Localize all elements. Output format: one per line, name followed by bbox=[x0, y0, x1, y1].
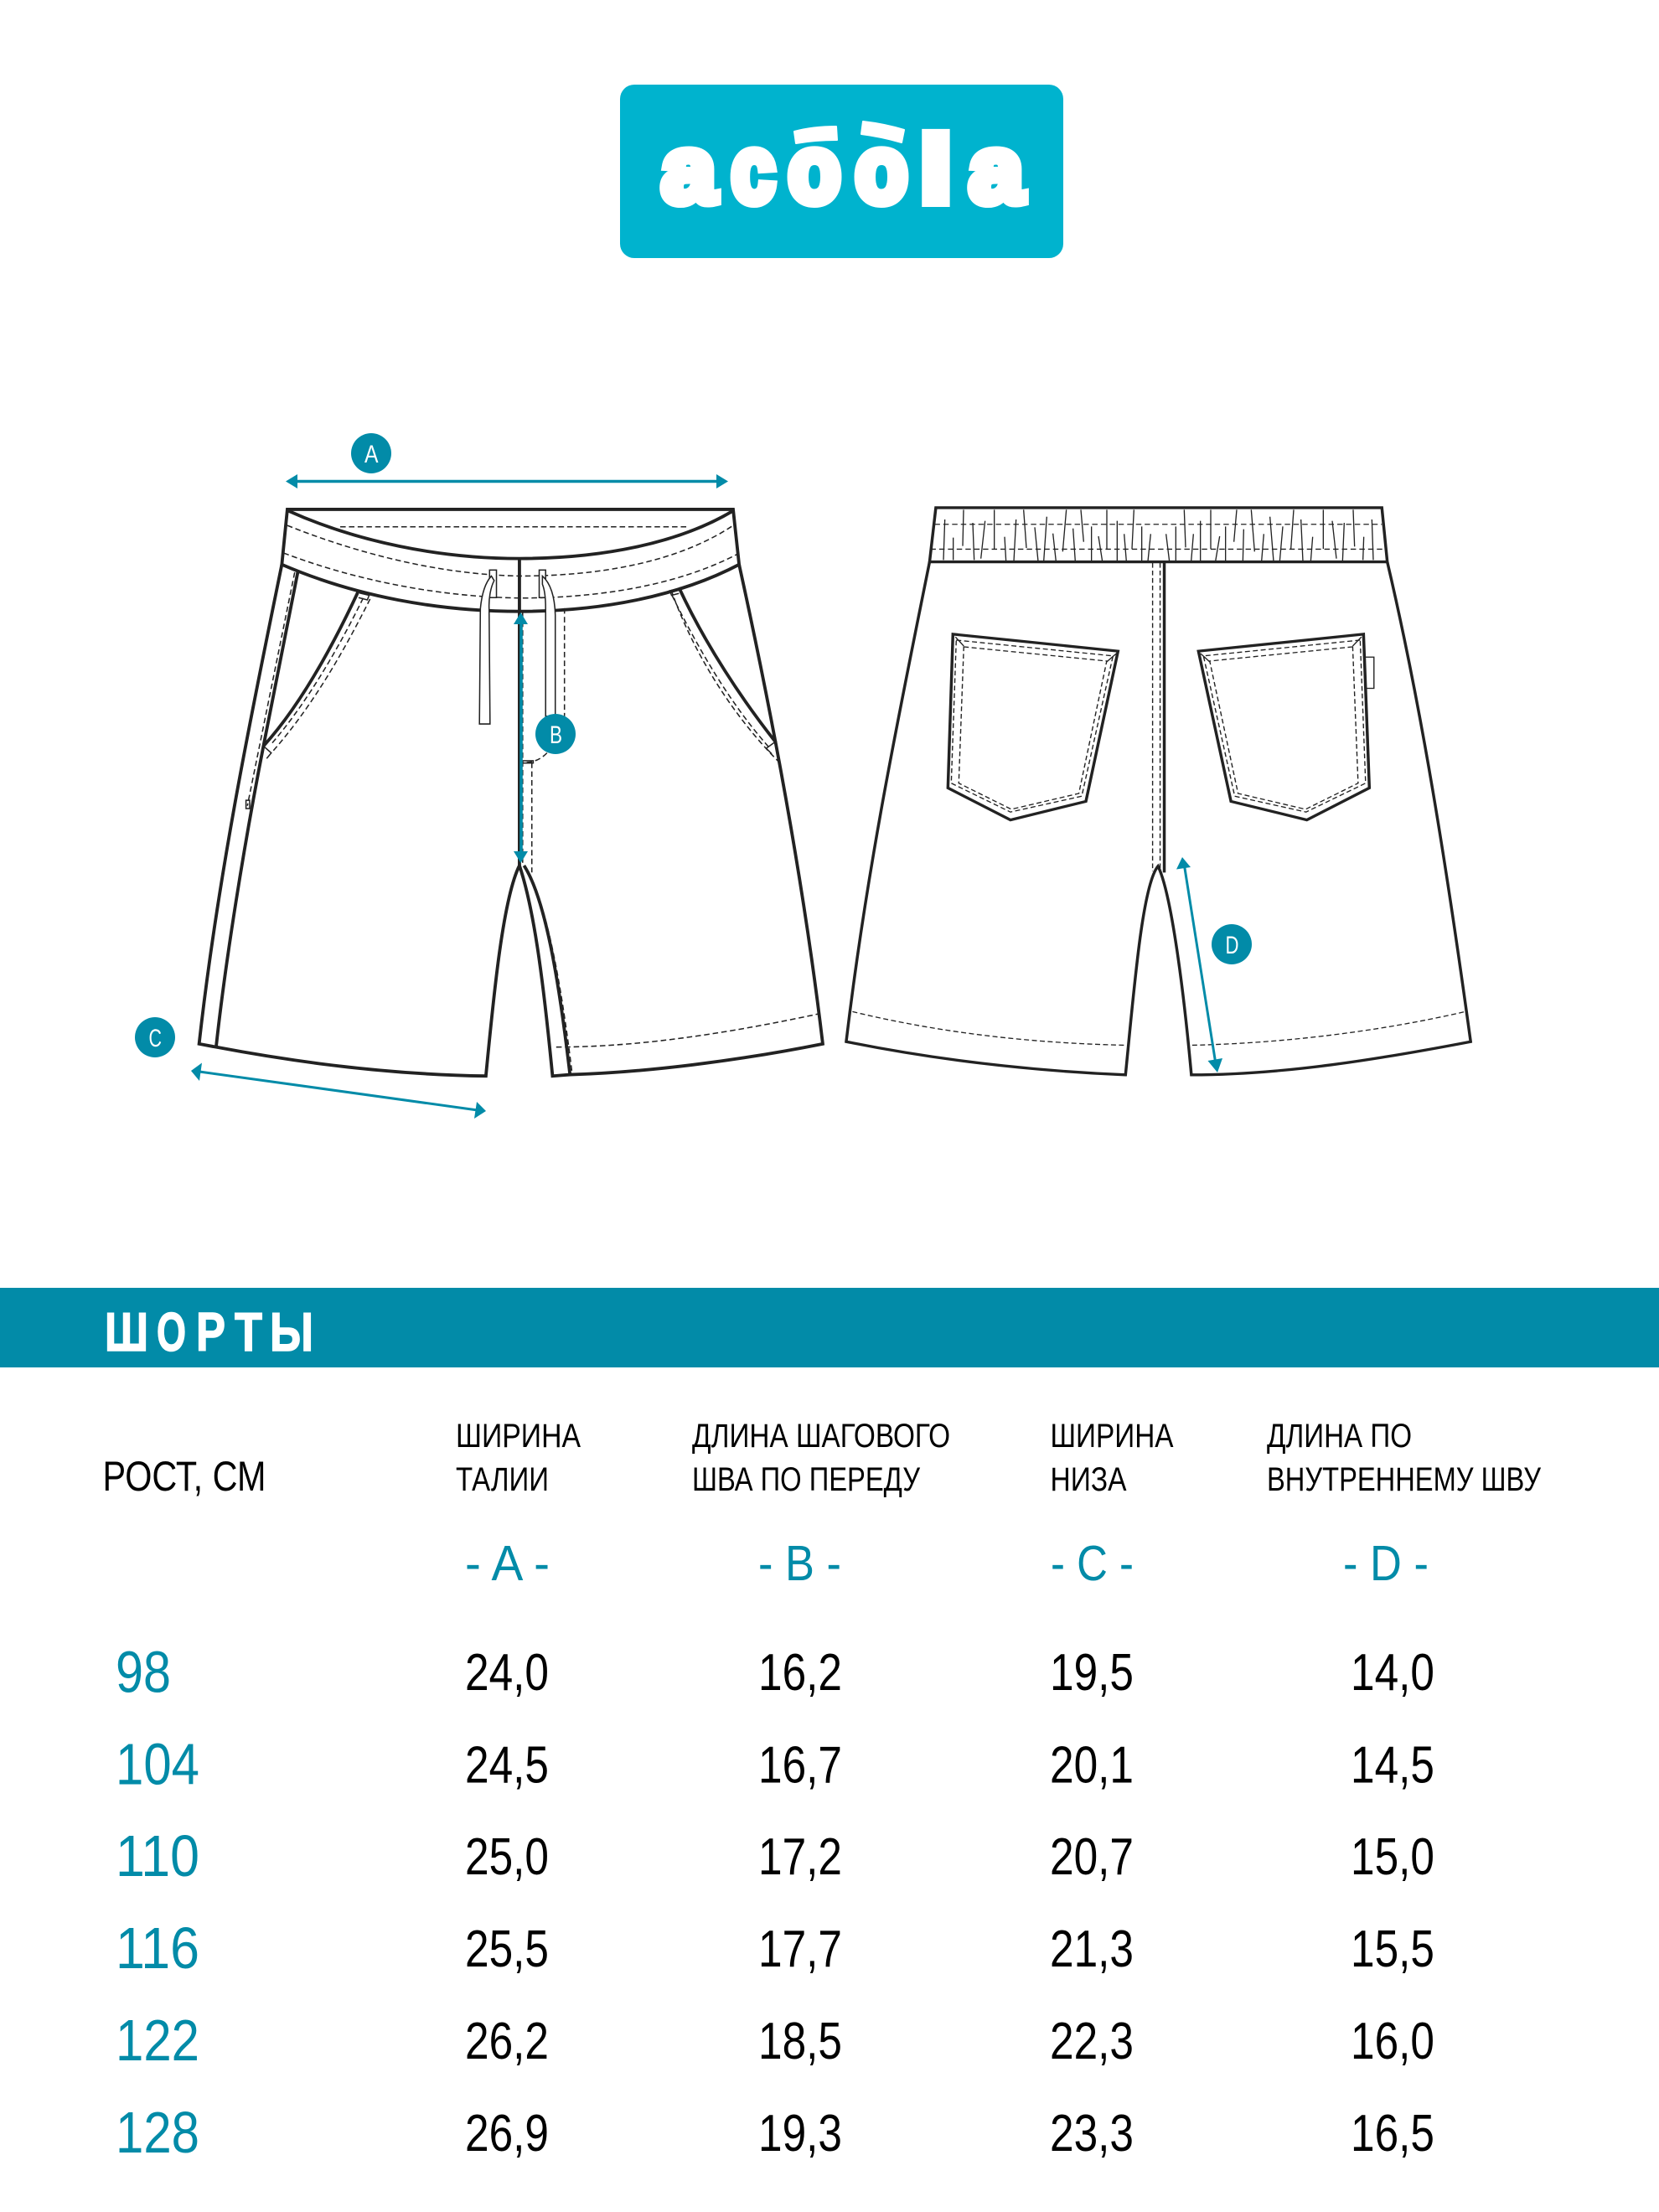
badge D: D bbox=[1225, 932, 1238, 959]
column header: front rise: ДЛИНА ШАГОВОГО bbox=[692, 1418, 950, 1455]
right back pocket bbox=[1198, 634, 1374, 820]
elastic waistband outline bbox=[929, 508, 1388, 562]
heading: shorts: Ш bbox=[105, 1301, 148, 1362]
logo: acoola: a bbox=[662, 117, 716, 222]
heading: shorts: О bbox=[157, 1301, 186, 1362]
row 128: 26,9 bbox=[465, 2105, 549, 2163]
row 116: 21,3 bbox=[1050, 1920, 1134, 1978]
row 122: 22,3 bbox=[1050, 2013, 1134, 2070]
drawstrings and fly bbox=[479, 570, 565, 872]
column header: inseam: ВНУТРЕННЕМУ ШВУ bbox=[1267, 1461, 1541, 1498]
row 122 bbox=[116, 2008, 1434, 2073]
row 104: 104 bbox=[116, 1731, 199, 1796]
row 104: 16,7 bbox=[758, 1736, 842, 1795]
arrow A: waist width bbox=[286, 474, 728, 488]
heading: shorts: Т bbox=[235, 1301, 262, 1362]
row 110: 25,0 bbox=[465, 1828, 549, 1886]
row 104: 20,1 bbox=[1050, 1736, 1134, 1795]
row 116: 25,5 bbox=[465, 1920, 549, 1978]
arrow D: inseam bbox=[1176, 857, 1222, 1072]
row 128: 128 bbox=[116, 2100, 199, 2165]
logo: acoola: a bbox=[969, 117, 1024, 222]
column letters bbox=[465, 1536, 1429, 1591]
row 98: 14,0 bbox=[1351, 1644, 1434, 1702]
left back pocket bbox=[948, 634, 1118, 820]
row 98 bbox=[116, 1639, 1434, 1704]
row 128: 19,3 bbox=[758, 2105, 842, 2163]
left pocket bbox=[246, 572, 370, 809]
row 122: 18,5 bbox=[758, 2013, 842, 2070]
column header: hem width: НИЗА bbox=[1051, 1461, 1127, 1498]
row 116: 116 bbox=[116, 1915, 199, 1981]
row 122: 26,2 bbox=[465, 2013, 549, 2070]
logo: acoola: o bbox=[788, 117, 840, 222]
heading: shorts: Ы bbox=[270, 1301, 313, 1362]
waistband gathers, left part bbox=[943, 509, 1170, 561]
row 110: 20,7 bbox=[1050, 1828, 1134, 1886]
column header: inseam: ДЛИНА ПО bbox=[1267, 1418, 1412, 1455]
column header: waist width: ШИРИНА bbox=[456, 1418, 581, 1455]
column header: inseam bbox=[1267, 1418, 1541, 1498]
back view of shorts bbox=[846, 508, 1470, 1075]
column header: waist width: ТАЛИИ bbox=[456, 1461, 549, 1498]
body outline bbox=[846, 562, 1470, 1075]
column letters: - C - bbox=[1051, 1536, 1134, 1591]
row 98: 24,0 bbox=[465, 1644, 549, 1702]
column header: front rise: ШВА ПО ПЕРЕДУ bbox=[692, 1461, 920, 1498]
column letters: - A - bbox=[465, 1536, 550, 1591]
arrow C: hem width bbox=[191, 1062, 486, 1119]
heading: shorts: Р bbox=[196, 1301, 225, 1362]
row 116: 17,7 bbox=[758, 1920, 842, 1978]
logo: acoola: o bbox=[855, 117, 907, 222]
waistband bbox=[282, 509, 739, 612]
row 104 bbox=[116, 1731, 1434, 1796]
badge A: A bbox=[364, 441, 379, 468]
row 110: 17,2 bbox=[758, 1828, 842, 1886]
row 116 bbox=[116, 1915, 1434, 1981]
row 104: 24,5 bbox=[465, 1736, 549, 1795]
badge C bbox=[135, 1017, 175, 1057]
logo: acoola: c bbox=[731, 117, 775, 222]
row 122: 122 bbox=[116, 2008, 199, 2073]
section header band bbox=[0, 1288, 1659, 1367]
row 128: 23,3 bbox=[1050, 2105, 1134, 2163]
row 122: 16,0 bbox=[1351, 2013, 1434, 2070]
column header: waist width bbox=[456, 1418, 581, 1498]
row 98: 16,2 bbox=[758, 1644, 842, 1702]
row 128 bbox=[116, 2100, 1434, 2165]
column header: front rise bbox=[692, 1418, 950, 1498]
row 110 bbox=[116, 1823, 1434, 1889]
row 98: 98 bbox=[116, 1639, 171, 1704]
row 98: 19,5 bbox=[1050, 1644, 1134, 1702]
row 104: 14,5 bbox=[1351, 1736, 1434, 1795]
row 116: 15,5 bbox=[1351, 1920, 1434, 1978]
badge C: C bbox=[149, 1025, 162, 1052]
column letters: - D - bbox=[1343, 1536, 1429, 1591]
row 110: 15,0 bbox=[1351, 1828, 1434, 1886]
badge B: B bbox=[550, 721, 562, 749]
badge B bbox=[535, 714, 576, 754]
front view of shorts bbox=[199, 509, 823, 1076]
logo: acoola bbox=[620, 85, 1063, 258]
column header: hem width bbox=[1051, 1418, 1174, 1498]
body outline bbox=[199, 565, 823, 1076]
waistband gathers, right part bbox=[1176, 509, 1373, 561]
row 128: 16,5 bbox=[1351, 2105, 1434, 2163]
column letters: - B - bbox=[758, 1536, 841, 1591]
badge A bbox=[351, 433, 391, 473]
logo: acoola: l bbox=[920, 117, 952, 222]
column header: height: РОСТ, СМ bbox=[102, 1453, 266, 1500]
right pocket bbox=[669, 587, 779, 762]
badge D bbox=[1212, 924, 1252, 964]
arrow B: front rise bbox=[514, 612, 528, 863]
row 110: 110 bbox=[116, 1823, 199, 1889]
column header: hem width: ШИРИНА bbox=[1051, 1418, 1174, 1455]
